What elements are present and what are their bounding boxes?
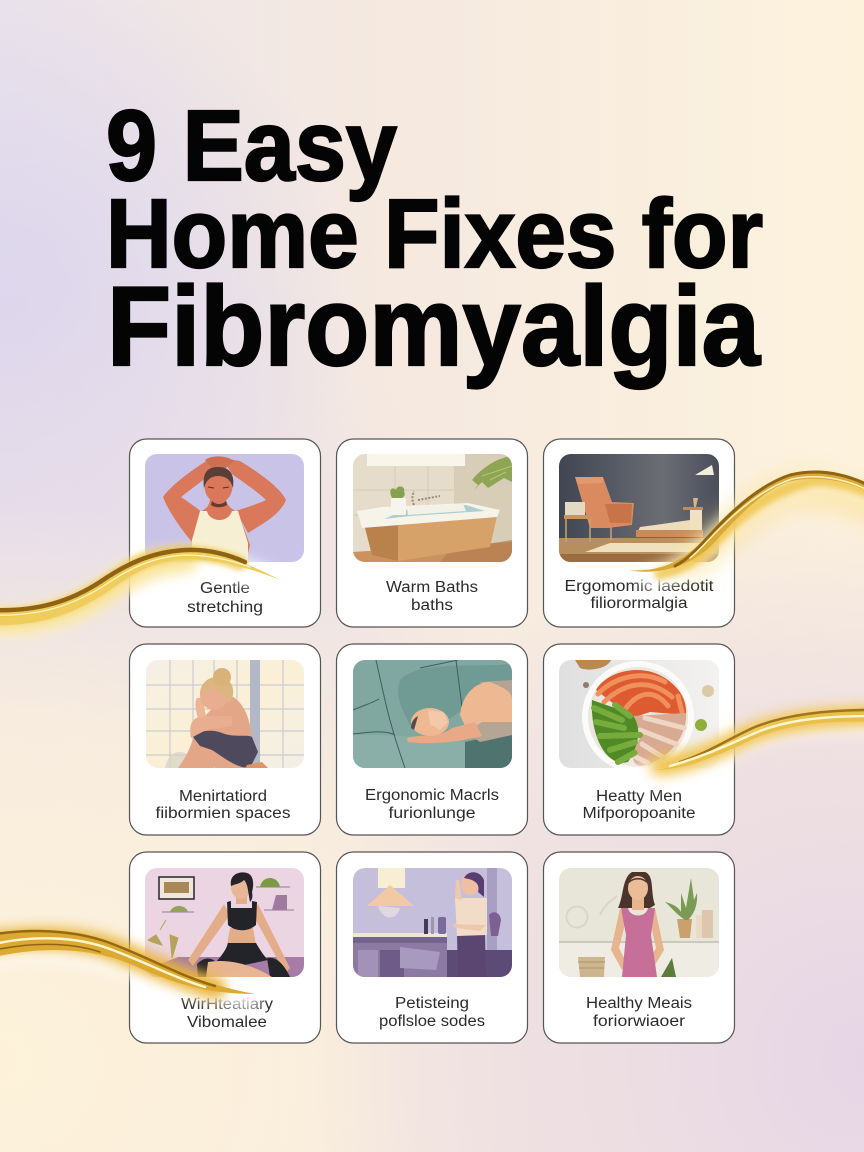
label: WirHteatiary [181,996,273,1013]
label: Menirtatiord [179,788,267,805]
card: kitchen [336,852,528,1043]
card: healthy meals [544,852,734,1043]
illustration: armchair room [559,454,719,562]
label: Ergomomic laedotit [564,578,714,595]
label: poflsloe sodes [379,1013,485,1030]
title: Fibromyalgia [107,264,761,389]
label: Healthy Meais [586,995,692,1012]
label [582,788,696,822]
label [379,995,485,1030]
card: healthy meal [544,644,734,835]
illustration: woman in kitchen [353,868,512,977]
card: warm baths [336,439,528,627]
gold ribbon: left lower [0,931,255,1000]
illustration: woman stretching [145,454,304,562]
label [181,996,273,1031]
gold ribbon: right upper [628,471,864,578]
label: Warm Baths [386,579,478,596]
illustration: bathtub [353,454,512,562]
label: foriorwiaoer [593,1013,685,1030]
label: Gentle [200,580,250,597]
card: ergonomic macros [336,644,528,835]
label [586,995,692,1030]
title: Home Fixes for [106,179,763,288]
label: stretching [187,599,263,616]
title [106,90,763,389]
gold ribbon: left upper [0,550,280,625]
label [365,787,499,822]
label [187,580,263,616]
label: Petisteing [395,995,469,1012]
gold ribbon: right middle [640,708,864,776]
label: filiorormalgia [590,595,688,612]
illustration: person resting on sofa [353,660,512,768]
label: furionlunge [388,805,476,822]
illustration: woman in pink top [559,868,719,977]
label: Mifporopoanite [582,805,696,822]
card: yoga [130,852,320,1043]
illustration: food bowl [559,660,719,773]
card: meditation spaces [130,644,320,835]
label [386,579,478,614]
label: Vibomalee [187,1014,267,1031]
illustration: woman meditating [145,868,304,978]
label: Heatty Men [596,788,682,805]
illustration: seated person by window [146,660,304,768]
label: fiibormien spaces [156,805,291,822]
title: 9 Easy [106,90,397,202]
card: gentle stretching [130,439,320,627]
card: ergonomic [544,439,734,627]
label [564,578,714,612]
label [156,788,291,822]
label: Ergonomic Macrls [365,787,499,804]
label: baths [411,597,453,614]
